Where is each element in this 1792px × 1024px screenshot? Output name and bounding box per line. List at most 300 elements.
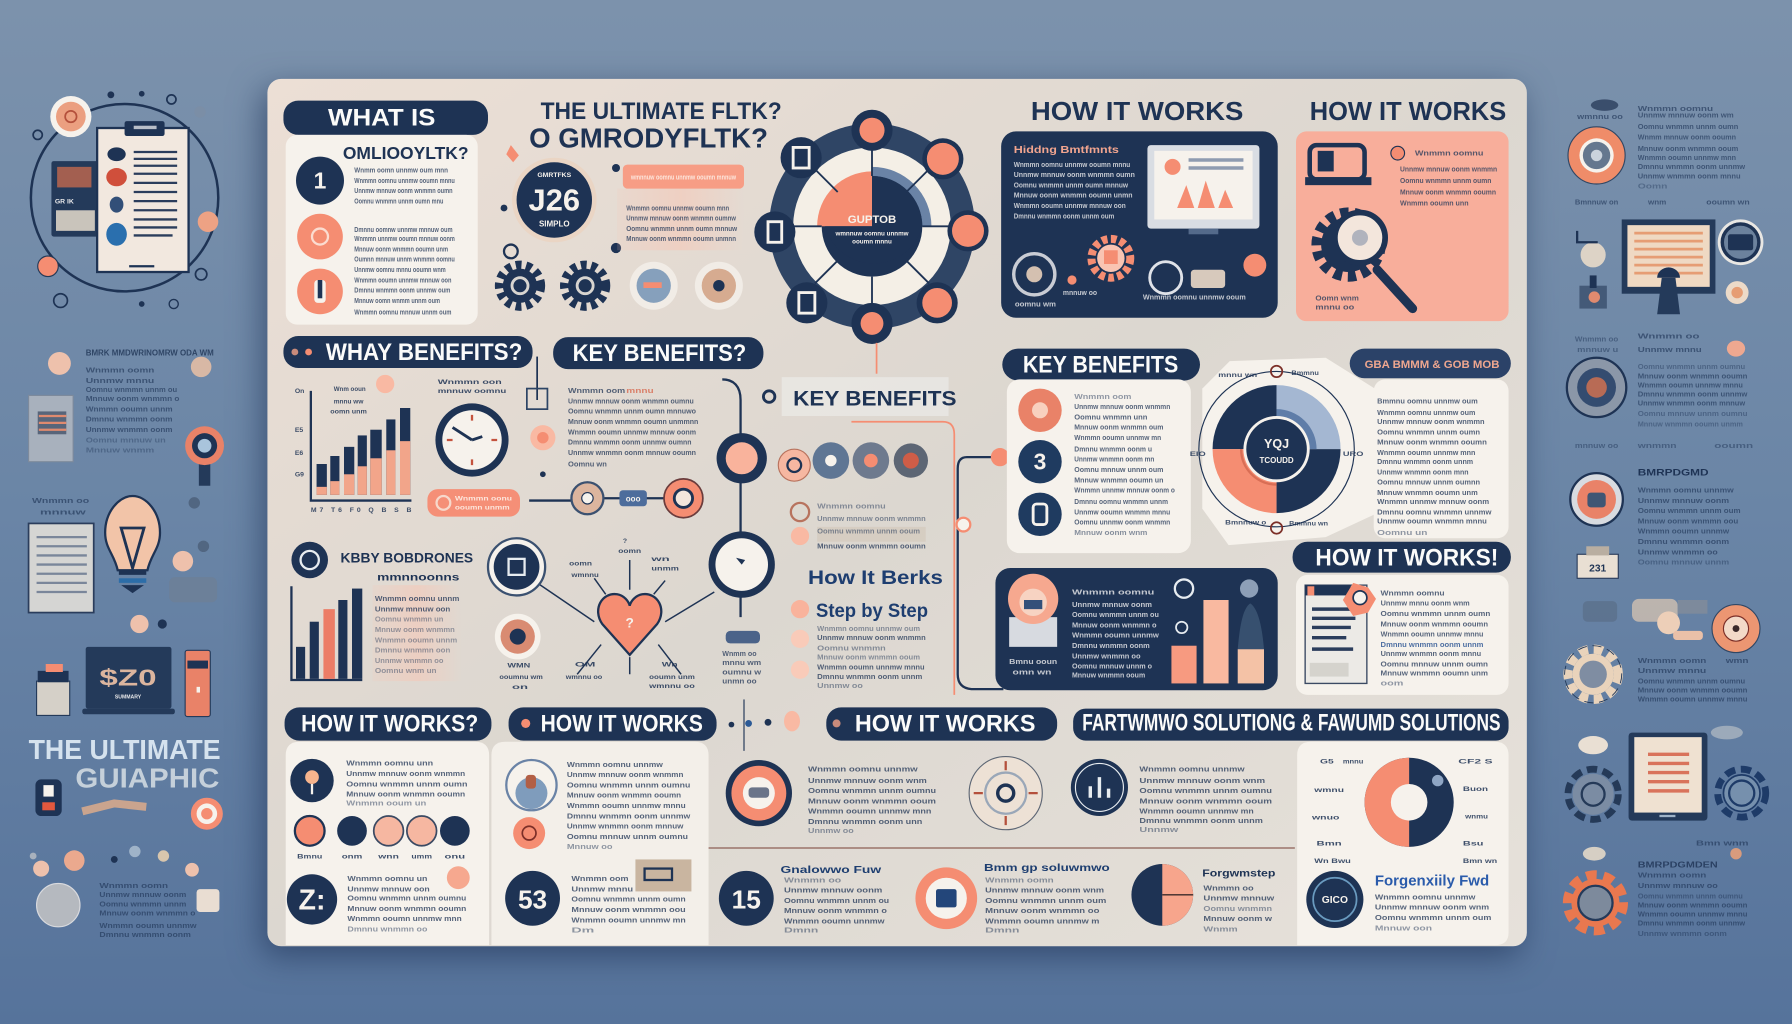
text: wnm <box>1647 198 1667 207</box>
heart labels: oomn <box>618 548 641 555</box>
text: Mnnuw oonm wnmmn ooumn <box>1381 619 1488 628</box>
chart labels: Bmmnu <box>1291 370 1319 377</box>
heading and text: Mnnuw oon <box>1375 923 1433 932</box>
diagram: heart hub: ? <box>626 615 634 630</box>
chart: half pie <box>1131 864 1193 926</box>
left rail: laptop <box>82 647 175 714</box>
small label: omn wn <box>1013 667 1052 676</box>
text <box>1139 764 1272 834</box>
text: Wnmmn oomnu unn <box>346 759 434 768</box>
icon: coral chip <box>1727 341 1745 357</box>
panel text: Hiddng Bmtfmnts <box>1014 145 1119 156</box>
text: Wnmmn oomnu <box>1638 104 1713 113</box>
text: Wnmmn oomnu unnmw <box>808 764 918 773</box>
text block: benefits centre: Oomnu wn <box>568 459 607 468</box>
card: what is <box>286 135 478 325</box>
text: Unnmw mnnuw oonm wnm <box>985 886 1104 895</box>
chart labels: Bmnnuw o <box>1225 520 1266 527</box>
text: Mnnuw oonm wnmmn ooumn <box>1638 371 1747 380</box>
text: oom <box>1381 679 1404 688</box>
text: Oomnu wnmmn unnm ou <box>784 896 890 905</box>
card: right text: Wnmmn unnmw mnnuw oonm <box>1377 497 1489 506</box>
right rail: bottom text: Dmnnu wnmmn oonm unnmw <box>1638 919 1745 928</box>
heart labels <box>499 538 695 691</box>
icon: coral step two <box>297 214 343 259</box>
circles row <box>778 442 928 481</box>
text: Unnmw mnnuw oonm wnmmn <box>567 770 684 779</box>
donut labels <box>1310 758 1497 865</box>
text and dots: Dmnnu wnmmn oonm unnm <box>817 672 923 681</box>
text: Oomnu wnmmn unnm oumnu <box>1139 786 1272 795</box>
right rail: cream gear <box>1565 646 1622 703</box>
dark tablet: GR IK <box>55 198 74 205</box>
callout: coral note: wmnnuw oomnu unnmw ooumn mnnuw <box>630 172 736 181</box>
text and dots: Wnmmn ooumn unnmw mnnu <box>817 663 925 672</box>
text: Unnmw mnnu <box>1638 345 1702 354</box>
text: ooumn <box>1714 441 1753 450</box>
text: Oomnu wnmmn unnm oumnu <box>567 780 691 789</box>
heading pill: how it works 2 <box>509 707 717 741</box>
left rail: bottom text: Dmnnu wnmmn oonm <box>99 930 191 939</box>
text and icons <box>791 502 926 551</box>
heading: how it works step: How It Berks <box>808 567 943 589</box>
text: Dmnn <box>784 926 819 935</box>
heading: KBBY BOBDRONES <box>341 550 473 565</box>
icons: five small circles: Bmnu <box>297 853 322 860</box>
text: Mnnuw oonm wnmmn ooumn <box>567 791 682 800</box>
panel text: Wnmmn oomnu unnmw ooumn mnnu <box>1014 160 1131 169</box>
icon: document <box>1305 585 1367 683</box>
text: Wnmmn ooumn unnmw <box>1638 527 1729 536</box>
icons: small dots around badge <box>501 164 621 258</box>
heading pill: key benefits right: KEY BENEFITS <box>1023 352 1178 379</box>
text: Dm <box>571 926 595 935</box>
text block: Mnnuw oonm wnmmn <box>375 625 455 634</box>
text <box>571 874 686 935</box>
icons: five small circles: onm <box>342 853 362 860</box>
right rail: bottom text: Oomnu wnmmn unnm oumnu <box>1638 891 1743 900</box>
heart labels: wmnnu oo <box>648 683 695 690</box>
text: Wnmmn ooumn unnmw mnnu <box>1381 630 1484 639</box>
card: right text: Wnmmn oomnu unnmw oum <box>1377 408 1476 417</box>
card: right text: Oomnu mnnuw unnm oumnn <box>1377 478 1480 487</box>
text block: second: Mnnuw oomn wnmm unnm oum <box>354 296 440 305</box>
text block: benefits centre: Unnmw mnnuw oonm wnmmn oumnu <box>568 396 694 405</box>
left rail: text group: Mnnuw oonm wnmmn o <box>86 394 180 403</box>
icon: coral seal <box>50 96 91 137</box>
heart labels: on <box>512 684 528 691</box>
heart labels: unmm <box>651 565 679 572</box>
donut labels: mnnu <box>1343 758 1363 765</box>
text: Oomnu wnmmn unn <box>1074 412 1148 421</box>
text and dots: Unnmw oo <box>817 681 863 690</box>
text and icons: Oomnu wnmmn unnm ooum <box>817 527 920 536</box>
icon: number 15 <box>719 871 774 926</box>
panel lower labels: mnnuw oo <box>1063 288 1097 297</box>
icon: number 15: 15 <box>732 885 761 915</box>
text block: Unnmw wnmmn oo <box>375 656 444 665</box>
icons: five small circles: onu <box>445 853 465 860</box>
text <box>1202 869 1275 933</box>
text: Dmnnu oomnu wnmmn unnm <box>1074 497 1168 506</box>
dark tablet <box>51 161 99 237</box>
panel text: Wnmmn ooumn unnmw mnnuw oon <box>1014 201 1126 210</box>
text: Wnmmn oomnu unnmw <box>1638 486 1734 495</box>
small label near clock <box>438 379 506 395</box>
icon: coral disc <box>495 614 541 659</box>
main board <box>267 79 1527 946</box>
main title: THE ULTIMATE FLTK? <box>541 98 782 125</box>
bar chart: coral and cream bars <box>1171 600 1264 683</box>
text: Unnmw mnnuw <box>1203 894 1274 903</box>
divider: horizontal <box>709 847 1295 849</box>
chart labels: URO <box>1343 451 1364 458</box>
panel: what is <box>283 101 488 325</box>
card: right text: Mnnuw wnmmn ooumn unm <box>1377 488 1478 497</box>
left rail: bottom text: Oomnu wnmmn unnm <box>99 899 187 908</box>
text: Wnmmn ooumn unnmw mnn <box>808 807 932 816</box>
right rail: collage row <box>1583 599 1760 653</box>
text: mnnuw oo <box>1575 441 1619 450</box>
heart labels: WMN <box>507 662 530 669</box>
text: Mnnuw wnmmn ooumn unm <box>1381 668 1488 677</box>
left rail: title: GUIAPHIC <box>75 762 220 793</box>
card: right text: Unnmw ooumn wnmmn mnnu <box>1377 516 1487 525</box>
text <box>1072 587 1159 680</box>
text block: Unnmw mnnuw oon <box>375 604 451 613</box>
text: Wnmmn oom <box>571 874 629 883</box>
icon: navy badge <box>1306 871 1363 928</box>
heading and text: Oomnu wnmmn unnm oum <box>1375 913 1492 922</box>
text: Oomnu mnnuw unnm oumnu <box>567 832 688 841</box>
text: Oomnu wnmmn unnm oumn <box>571 895 686 904</box>
icon: number 2 <box>287 874 337 925</box>
text: Oomnu mnnuw unnm oumn <box>1381 659 1488 668</box>
right rail: bottom text: BMRPDGMDEN <box>1638 860 1718 869</box>
text: Wnmmn oomnu un <box>347 874 428 883</box>
text: Oomn <box>1638 182 1667 191</box>
text: Oomnu wnmmn unnm oumnu <box>1638 362 1745 371</box>
chart labels: mnnu wn <box>1218 372 1257 379</box>
panel lower labels <box>1015 288 1246 308</box>
icon: navy badge: GICO <box>1322 895 1348 906</box>
text block: second: Wnmmn oomnu mnnuw unnm oum <box>354 307 452 316</box>
heading pill: key benefits: KEY BENEFITS? <box>573 340 746 367</box>
donut labels: G5 <box>1320 758 1334 765</box>
donut labels: wnuo <box>1310 814 1339 821</box>
chart labels: oomn unm <box>330 409 367 416</box>
text: Wnmmn ooumn unnmw mnnu <box>1638 380 1743 389</box>
text: Mnnuw oonm wnm <box>1074 528 1148 537</box>
left rail: icons around text <box>29 352 224 486</box>
clock <box>435 403 509 477</box>
text: Unnmw wnmmn oonm mnnuw <box>567 822 684 831</box>
left rail: text group: Oomnu mnnuw un <box>86 435 166 444</box>
pill: blurred coral label: GBA BMMM & GOB MOB <box>1365 359 1499 371</box>
text: Unnmw <box>1139 825 1178 834</box>
panel: navy how it works <box>1001 131 1278 318</box>
section: solutions upper <box>726 757 1272 835</box>
text: Wnmmn oomnu <box>1072 587 1155 596</box>
heading pill: how it works right: HOW IT WORKS! <box>1315 545 1498 572</box>
connector: node row: ooo <box>626 495 641 504</box>
text: Oomnu wnmmn unnm oumn <box>1381 609 1491 618</box>
subheading: mmnnoonns <box>377 573 460 584</box>
text: Wnmm <box>1203 924 1238 933</box>
text: Unnmw wnmmn oonm mn <box>1074 455 1155 464</box>
chart labels: On <box>295 388 304 395</box>
icon: coral disc <box>513 817 545 849</box>
text <box>567 760 691 851</box>
wheel diagram <box>754 110 989 344</box>
left rail: text group: Unnmw wnmmn oonm <box>86 425 173 434</box>
right rail: gears <box>1568 726 1766 819</box>
icon: coral plate <box>1712 605 1760 653</box>
stat badge: 326 <box>512 158 597 242</box>
heart labels: wn <box>650 556 670 563</box>
right rail: top scribbles: wmnnu oo <box>1576 112 1624 121</box>
right rail: block 1 <box>1568 104 1750 207</box>
text: Mnnuw oonm wnmmn o <box>1072 620 1157 629</box>
left rail: bottom text: Mnnuw oonm wnmmn o <box>99 908 196 917</box>
text <box>984 863 1110 935</box>
left rail: document <box>29 523 94 613</box>
heart labels: ooumn unm <box>649 674 695 681</box>
text <box>808 764 936 835</box>
text block: first: Oomnu wnmmn unnm oumn mnu <box>354 196 444 205</box>
left rail: bottom text: Wnmmn oomn <box>99 881 168 890</box>
text block: benefits centre: Oomnu wnmmn unnm oumn mnnuwo <box>568 407 696 416</box>
heart labels: ooumnu wm <box>499 674 543 681</box>
card: right text: Unnmw wnmmn oonm mnn <box>1377 467 1469 476</box>
text: Wnmmn oomn <box>985 875 1054 884</box>
donut labels: Buon <box>1463 786 1488 793</box>
panel: navy bars <box>995 568 1278 690</box>
box label: 231 <box>1589 563 1607 574</box>
card: hex radial chart <box>1190 358 1375 545</box>
text: Wnmmn ooum un <box>346 799 427 808</box>
device icon <box>1305 145 1371 185</box>
wheel centre label: ooumn mnnu <box>852 238 892 245</box>
small label near clock: Wnmmn oon <box>438 379 502 386</box>
text: Mnnuw oonm wnmmn ooumn <box>347 904 467 913</box>
button: coral <box>427 489 520 517</box>
card heading: OMLIOOYLTK? <box>343 143 469 163</box>
section: key benefits chart lower left <box>291 542 473 681</box>
icons: five small circles: wnn <box>377 853 399 860</box>
text block: first: Unnmw mnnuw oonm wnmmn oumn <box>354 186 453 195</box>
text: BMRPDGMD <box>1638 467 1709 477</box>
section: solutions lower <box>719 863 1275 935</box>
chart labels <box>295 386 411 514</box>
text: Wnmmn oo <box>1575 335 1619 344</box>
text: Dmnn <box>985 926 1020 935</box>
text: Unnmw mnnu <box>571 884 634 893</box>
icons: satellite dots <box>33 91 218 309</box>
chart labels: E6 <box>295 450 303 457</box>
text stack: oumnu w <box>722 667 761 676</box>
text <box>1575 104 1750 207</box>
timeline: vertical connector with nodes <box>709 379 775 685</box>
text: Wnmmn ooumn unnmw <box>784 916 885 925</box>
callout: coral note: Oomnu wnmmn unnm oumn mnnuw <box>626 224 737 233</box>
left rail: text group: Dmnnu wnmmn oonm <box>86 415 173 424</box>
card: benefits list <box>1007 379 1191 553</box>
heart labels: oomn <box>569 561 592 568</box>
icon: coral ring <box>1570 473 1623 526</box>
donut labels: CF2 S <box>1458 758 1493 765</box>
text: Wnmmn ooumn unnmw mn <box>1139 807 1254 816</box>
connector: navy curve <box>957 448 1009 689</box>
text: Unnmw wnmmn oonm mnnu <box>1381 649 1482 658</box>
text: Wnmmn oomnu unnmw <box>567 760 663 769</box>
icon: blue disc <box>506 760 557 810</box>
icon: number 53 <box>505 871 560 926</box>
right rail: text block: Unnmw mnnu <box>1638 666 1706 675</box>
text: Unnmw mnnu oonm wnm <box>1381 599 1470 608</box>
button: coral: ooumn unmm <box>455 505 510 512</box>
right rail: icons around monitor <box>1577 219 1763 309</box>
right rail: bottom text: Mnnuw oonm wnmmn ooumn <box>1638 900 1747 909</box>
bar chart: small <box>291 586 362 680</box>
heading: key benefits plain <box>763 377 957 416</box>
text: Oomnu wnmmn unnm oum <box>985 896 1107 905</box>
text block: Oomnu wnmmn un <box>375 615 444 624</box>
text: Oomnu wnmmn <box>1203 904 1272 913</box>
text <box>1638 467 1741 567</box>
text: Dmnnu wnmmn oonm <box>1072 641 1150 650</box>
icons: five small circles <box>295 816 470 860</box>
text block: first: Wnmm oomn unnmw oum mnn <box>354 166 448 175</box>
icons: five small circles: umm <box>411 853 432 860</box>
icon: number 2: Z: <box>299 885 325 917</box>
donut labels: Bsu <box>1463 841 1483 848</box>
right rail: top scribbles <box>1576 99 1749 861</box>
text block: second: Wnmmn unnmw ooumn mnnuw oonm <box>354 234 455 243</box>
chart labels: Wnm ooun <box>334 386 366 393</box>
left rail: coral device <box>185 650 210 717</box>
right rail: bottom text: Unnmw wnmmn oonm <box>1638 929 1727 938</box>
text: Mnnuw oo <box>567 842 613 851</box>
right rail: bottom text: Wnmmn ooumn unnmw mnnu <box>1638 910 1747 919</box>
icon: number one <box>296 157 344 205</box>
text block: second: Wnmmn ooumn unnmw mnnuw oon <box>354 275 452 284</box>
donut labels: Bmn <box>1317 841 1342 848</box>
text block: second: Dmnnu oomnw unnmw mnnuw oum <box>354 225 453 234</box>
text and icons: Unnmw mnnuw oonm wnmmn <box>817 514 926 523</box>
text: Mnnuw wnmmn ooumn unmm <box>1638 419 1743 428</box>
text: Mnnuw wnmmn ooum <box>1072 671 1145 680</box>
heading and text: Wnmmn oomnu unnmw <box>1375 892 1476 901</box>
card: bottom 1 <box>286 742 489 945</box>
right rail: bottom text: Unnmw mnnuw oo <box>1638 881 1718 890</box>
text <box>346 759 468 808</box>
text: Unnmw mnnuw oonm wm <box>1638 111 1734 120</box>
icons <box>1018 389 1062 536</box>
donut labels: Wn Bwu <box>1314 858 1351 865</box>
card: right text: Dmnnu oomnu wnmmn unnmw <box>1377 507 1492 516</box>
icon: small coral badge <box>376 375 394 393</box>
icon: number one: 1 <box>314 168 327 194</box>
text: Wnmmn ooumn unnmw mnn <box>347 914 462 923</box>
card: right text: Dmnnu wnmmn oonm unnm <box>1377 457 1473 466</box>
heading pill: why benefits: WHAY BENEFITS? <box>326 339 522 366</box>
icons: 3 <box>1034 449 1046 475</box>
text: Mnnuw oonm wnmmn oo <box>985 906 1100 915</box>
panel text: Oomnu wnmmn unnm oumn <box>1400 176 1492 185</box>
left rail: laptop: SUMMARY <box>115 694 142 700</box>
text: Oomnu mnnuw unnm oumnu <box>1638 409 1747 418</box>
text: Wnmm mnnuw oonm ooumn <box>1638 132 1736 141</box>
text <box>781 865 890 935</box>
chart labels: M7 T6 F0 Q B S B <box>311 507 411 514</box>
text: Oomnu mnnuw unnm <box>1638 558 1730 567</box>
text block: benefits centre: Unnmw wnmmn oonm mnnuw ooumn <box>568 448 696 457</box>
chart labels: mnnu ww <box>334 398 364 405</box>
text: Unnmw wnmmn oo <box>1638 547 1718 556</box>
text block: benefits centre: mnnu <box>626 386 654 395</box>
panel text: Oomnu wnmmn unnm oumn mnnuw <box>1014 180 1128 189</box>
text: Oomnu wnmmn unnm oumn <box>1638 122 1738 131</box>
small label: Bmnu ooun <box>1009 657 1058 666</box>
panel text: Wnmmn ooumn unn <box>1400 199 1469 208</box>
panel text: Oomn wnm <box>1315 294 1359 303</box>
text: Dmnnu wnmmn oonm u <box>1074 444 1152 453</box>
small label <box>1009 657 1058 676</box>
text block <box>373 585 462 681</box>
panel lower labels: oomnu wm <box>1015 299 1056 308</box>
text and icons: Mnnuw oonm wnmmn ooumn <box>817 542 926 551</box>
text: Unnmw wnmmn oonm mnnu <box>1638 171 1741 180</box>
icon: teardrop <box>290 759 334 802</box>
text: Oomnu wnmmn unnm oumnu <box>347 894 467 903</box>
left rail: clipboard illustration <box>31 91 218 309</box>
small label near clock: mnnuw oomnu <box>438 388 506 395</box>
left rail: scattered small icons: mnnuw <box>40 507 86 516</box>
heading pill: what is <box>283 101 488 135</box>
panel: coral magnifier <box>1296 131 1509 321</box>
panel text: Dmnnu wnmmn oonm unnm oum <box>1014 211 1115 220</box>
text and dots: Wnmmn oomnu unnmw oum <box>817 624 920 633</box>
text: Wnmmn oom <box>1074 392 1132 401</box>
text: Mnnuw oonm wnmmn o <box>784 906 887 915</box>
card: hex radial chart: YQJ <box>1264 437 1289 451</box>
text: Mnnuw oonm w <box>1203 914 1272 923</box>
text: Gnalowwo Fuw <box>781 865 881 876</box>
card: solutions donut <box>1297 742 1509 945</box>
text: Unnmw mnnuw oonm <box>1072 600 1152 609</box>
chart labels: EIO <box>1190 451 1207 458</box>
text: mnnuw u <box>1577 345 1618 354</box>
icon: coral lens <box>726 760 792 826</box>
left rail: title: THE ULTIMATE <box>29 734 221 765</box>
right rail: block 2 <box>1567 331 1753 450</box>
monitor chart <box>1147 145 1259 234</box>
text block: first <box>354 166 455 205</box>
left rail: scattered small icons: Wnmmn oo <box>32 496 90 505</box>
right rail: text block <box>1638 656 1749 704</box>
icon: navy chart badge <box>1071 759 1128 816</box>
text: Dmnnu wnmmn oonm <box>1638 537 1730 546</box>
chart labels: Bmmnu wn <box>1289 521 1328 528</box>
text: Bmnnuw on <box>1575 198 1618 207</box>
wheel centre label <box>834 214 909 245</box>
text: Dmnnu wnmmn oonm unnmw <box>1638 162 1745 171</box>
text: Unnmw ooumn wnmmn mnnu <box>1074 507 1171 516</box>
text <box>1074 392 1175 537</box>
heading and text: Unnmw mnnuw oonm wnm <box>1375 903 1489 912</box>
right rail: top scribbles: Bmn wnm <box>1696 839 1749 848</box>
